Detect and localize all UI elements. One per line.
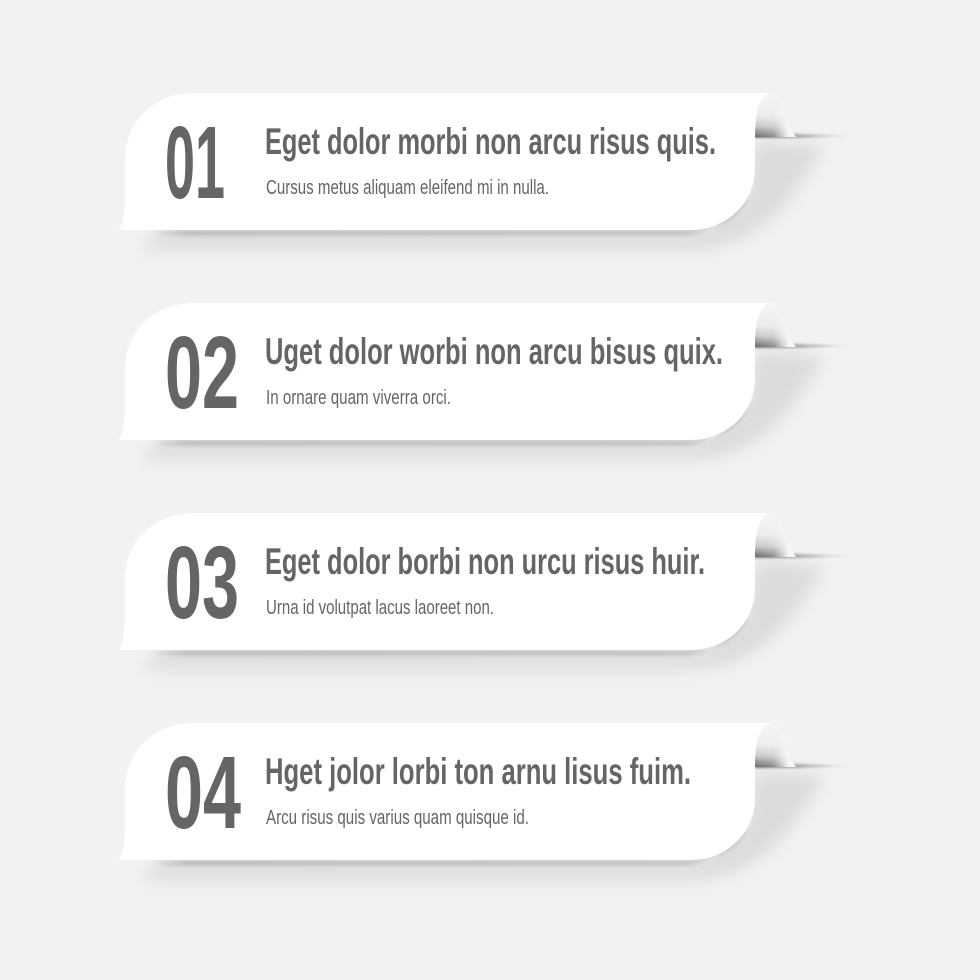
number: 01 (165, 105, 225, 220)
number: 02 (165, 315, 239, 430)
text: Urna id volutpat lacus laoreet non. (266, 597, 494, 619)
fold shadow line (755, 554, 860, 558)
card body (119, 723, 770, 860)
curled corner (755, 723, 796, 767)
heading: Hget jolor lorbi ton arnu lisus fuim. (265, 751, 691, 792)
card body (119, 513, 770, 650)
text: Arcu risus quis varius quam quisque id. (266, 807, 529, 829)
card body (119, 303, 770, 440)
curled corner (755, 513, 796, 557)
fold shadow line (755, 134, 860, 138)
heading: Eget dolor borbi non urcu risus huir. (265, 541, 705, 582)
text: In ornare quam viverra orci. (266, 387, 451, 409)
heading: Uget dolor worbi non arcu bisus quix. (265, 331, 723, 372)
card body (119, 93, 770, 230)
panel: item 03 (119, 513, 860, 670)
card shadow (140, 350, 825, 460)
text: Cursus metus aliquam eleifend mi in nulla. (266, 177, 549, 199)
fold shadow line (755, 764, 860, 768)
curled corner (755, 93, 796, 137)
panel: item 04 (119, 723, 860, 880)
heading: Eget dolor morbi non arcu risus quis. (265, 121, 716, 162)
panel: item 02 (119, 303, 860, 460)
panel: item 01 (119, 93, 860, 250)
number: 03 (165, 525, 239, 640)
card shadow (140, 560, 825, 670)
card shadow (140, 770, 825, 880)
number: 04 (165, 735, 241, 850)
fold shadow line (755, 344, 860, 348)
card shadow (140, 140, 825, 250)
curled corner (755, 303, 796, 347)
